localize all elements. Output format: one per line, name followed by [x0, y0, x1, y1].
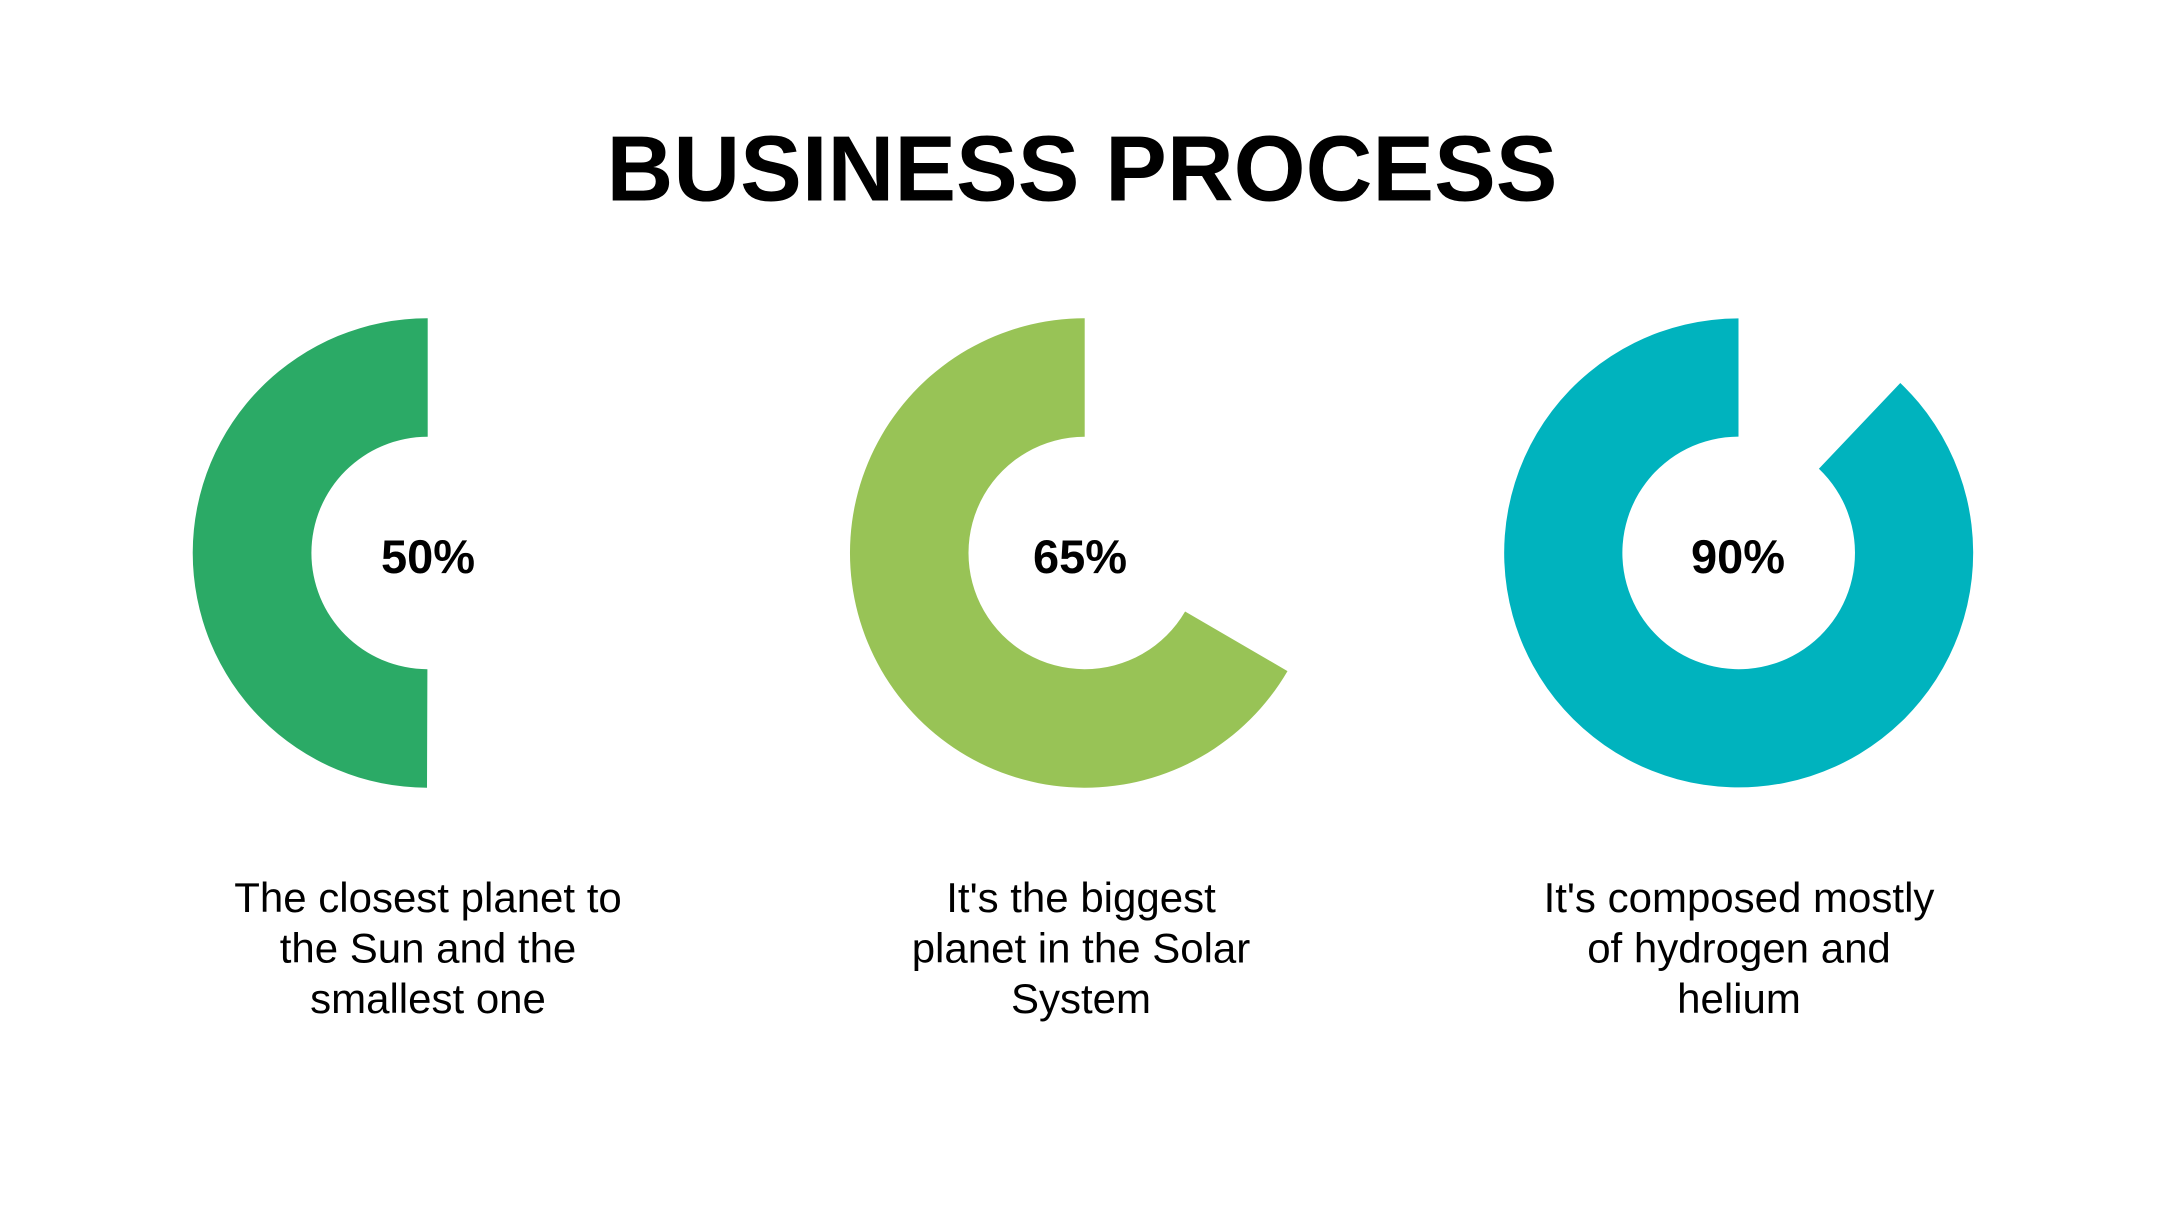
panel: 50% donut	[193, 318, 622, 1022]
description: Mercury: The closest planet to	[234, 874, 622, 921]
value: 65%: 65%	[1033, 530, 1127, 583]
value: 50%: 50%	[381, 530, 475, 583]
description: Jupiter: It's the biggest	[946, 874, 1216, 921]
description: Saturn: helium	[1677, 975, 1801, 1022]
donut chart: 65%	[850, 318, 1288, 788]
description: Mercury: smallest one	[310, 975, 546, 1022]
donut chart: 90%	[1504, 318, 1973, 787]
value: 90%: 90%	[1691, 530, 1785, 583]
title: BUSINESS PROCESS	[607, 116, 1557, 220]
description: Jupiter: planet in the Solar	[912, 924, 1250, 972]
description: Mercury: the Sun and the	[280, 924, 576, 972]
description: Jupiter: System	[1011, 975, 1151, 1022]
panel: 65% donut	[850, 318, 1288, 1022]
panel: 90% donut	[1504, 318, 1973, 1022]
donut chart: 50%	[193, 318, 428, 788]
description: Saturn: of hydrogen and	[1587, 924, 1891, 972]
description: Saturn: It's composed mostly	[1544, 874, 1934, 921]
